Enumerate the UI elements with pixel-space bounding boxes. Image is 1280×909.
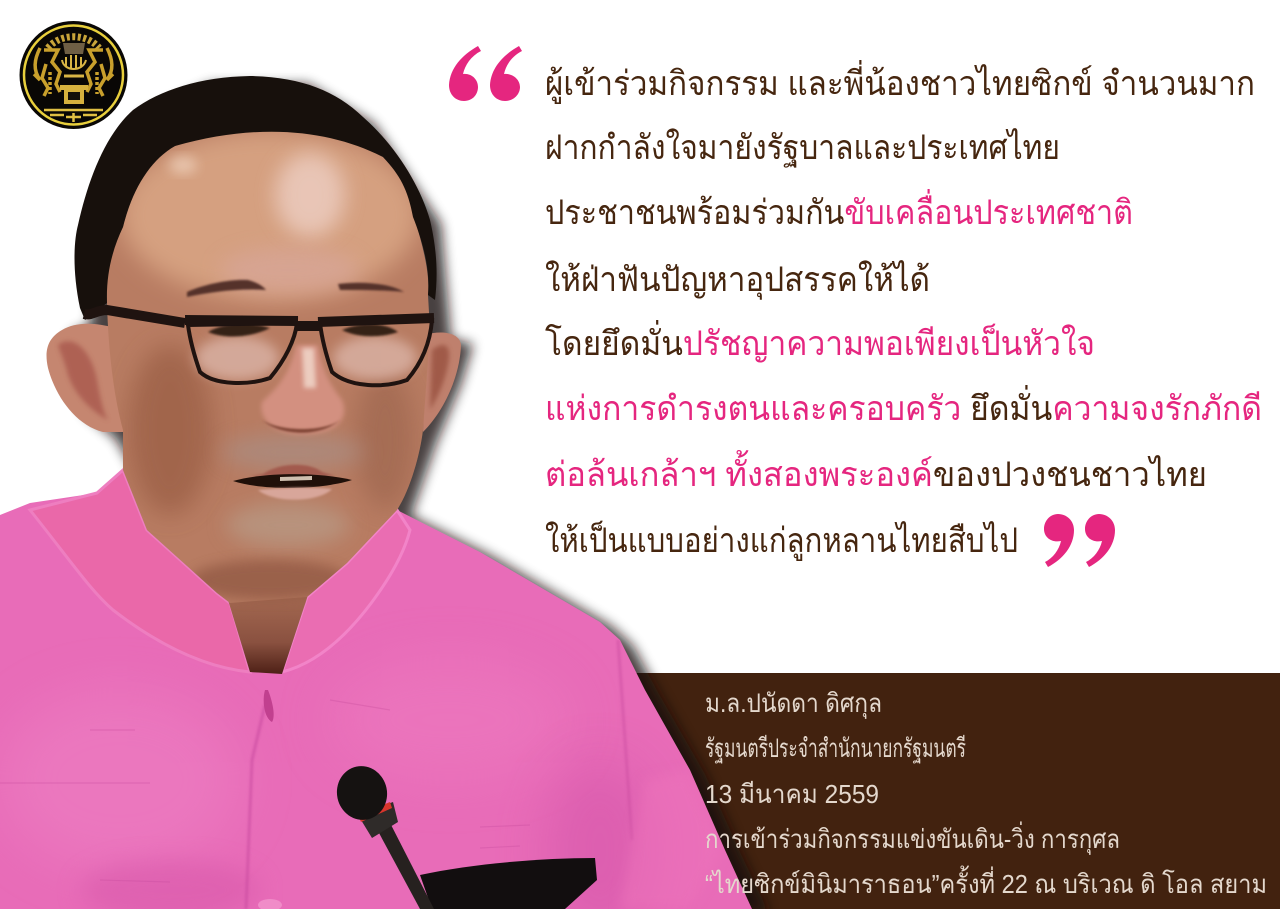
- nose: [261, 345, 344, 434]
- microphone: [332, 761, 434, 909]
- face shading: [120, 130, 420, 600]
- quote line 4: ให้ฝ่าฟันปัญหาอุปสรรคให้ได้: [545, 260, 930, 300]
- emblem: base ornament: [44, 110, 103, 122]
- speaker name: ม.ล.ปนัดดา ดิศกุล: [705, 688, 882, 719]
- emblem: government seal: [20, 21, 128, 129]
- right collar: [282, 510, 410, 672]
- quote line 2: ฝากกำลังใจมายังรัฐบาลและประเทศไทย: [545, 128, 1060, 168]
- emblem: cap: [63, 43, 85, 54]
- event line 1: การเข้าร่วมกิจกรรมแข่งขันเดิน-วิ่ง การกุศล: [705, 821, 1120, 855]
- right ear inner: [430, 345, 449, 410]
- date: 13 มีนาคม 2559: [705, 779, 879, 809]
- speaker details: [705, 688, 1267, 899]
- emblem: right lion: [87, 48, 113, 96]
- left ear: [47, 324, 125, 432]
- closing quotation mark: [1044, 514, 1115, 567]
- glasses: [84, 310, 434, 385]
- neck: [228, 595, 308, 674]
- left ear inner: [58, 341, 108, 420]
- eyes: [208, 324, 398, 337]
- eyebrows: [187, 280, 404, 297]
- portrait photo: man in pink shirt: [0, 76, 752, 909]
- shirt pocket: [420, 858, 597, 909]
- emblem: flame arc: [48, 37, 99, 48]
- shirt button: [264, 690, 274, 722]
- opening quotation mark: [449, 46, 522, 101]
- face: [107, 131, 430, 603]
- emblem: pedestal: [60, 85, 88, 104]
- lower shirt button: [258, 899, 282, 909]
- quote line 5: โดยยึดมั่นปรัชญาความพอเพียงเป็นหัวใจ: [545, 320, 1095, 363]
- speaker position: รัฐมนตรีประจำสำนักนายกรัฐมนตรี: [705, 733, 966, 764]
- hair: [74, 76, 437, 320]
- pink shirt: [0, 470, 752, 909]
- quote line 7: ต่อล้นเกล้าฯ ทั้งสองพระองค์ของปวงชนชาวไทย: [545, 450, 1207, 494]
- quote text: [545, 60, 1262, 561]
- quote line 6: แห่งการดำรงตนและครอบครัว ยึดมั่นความจงรักภักดี: [545, 385, 1262, 428]
- shirt shading and fabric folds: [0, 640, 725, 909]
- mouth: [233, 465, 352, 500]
- quote line 3: ประชาชนพร้อมร่วมกันขับเคลื่อนประเทศชาติ: [545, 189, 1133, 232]
- person shadow: [11, 84, 769, 909]
- footer band: speaker details background: [620, 673, 1280, 909]
- emblem: left lion: [34, 48, 60, 96]
- quote line 8: ให้เป็นแบบอย่างแก่ลูกหลานไทยสืบไป: [545, 520, 1018, 561]
- emblem: bowl: [62, 55, 86, 76]
- right ear: [423, 332, 461, 432]
- left collar: [30, 470, 250, 672]
